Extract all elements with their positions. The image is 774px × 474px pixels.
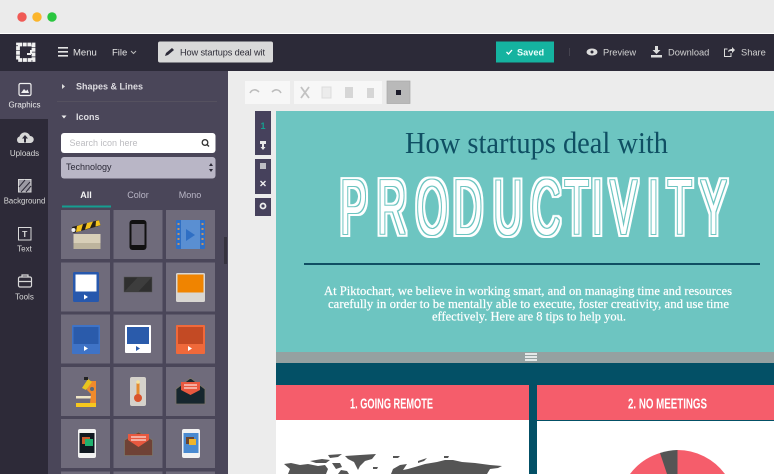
- card: no meetings: [537, 385, 774, 474]
- file menu: File: [112, 48, 127, 58]
- world map: [284, 454, 502, 474]
- duplicate and delete controls: [255, 159, 271, 194]
- shapes and lines section: Shapes & Lines: [76, 82, 143, 92]
- icon: film video: [176, 220, 205, 249]
- icon style tabs: All: [80, 190, 92, 200]
- icon: thermometer: [130, 377, 146, 406]
- icon: dark envelope: [176, 378, 205, 404]
- card: going remote: [276, 385, 529, 474]
- intro paragraph: effectively. Here are 8 tips to help you.: [432, 310, 626, 324]
- category dropdown: Technology: [66, 162, 112, 172]
- rail item: uploads: Uploads: [10, 149, 39, 158]
- icon: dark screen: [124, 277, 152, 292]
- infographic canvas: [276, 111, 774, 474]
- share action: Share: [741, 48, 766, 58]
- rail item: text: Text: [17, 244, 33, 254]
- settings control: [255, 198, 271, 216]
- saved button: [496, 42, 554, 62]
- menu label: Menu: [73, 48, 97, 58]
- icon: orange media player: [176, 325, 205, 354]
- icon: phone with chat blue: [182, 429, 200, 458]
- productivity headline: PRODUCTIVITY: [340, 165, 727, 252]
- icon: microscope: [76, 377, 96, 407]
- title line: How startups deal with: [405, 125, 668, 160]
- browser window title bar: [0, 0, 774, 34]
- document name field: How startups deal wit: [180, 48, 265, 58]
- section side toolbar: [255, 111, 271, 216]
- rail item: graphics: Graphics: [8, 100, 41, 110]
- icon style tabs: Mono: [179, 190, 201, 200]
- category dropdown: [61, 157, 216, 178]
- preview action: Preview: [603, 48, 636, 58]
- rail item: uploads: [10, 132, 39, 158]
- icon: clapperboard: [72, 220, 100, 249]
- share action: [724, 47, 766, 58]
- icon style tabs: [62, 190, 201, 208]
- icon: orange screen: [176, 273, 205, 302]
- top navigation bar: [0, 34, 774, 71]
- saved button: Saved: [517, 48, 544, 58]
- search field: Search icon here: [70, 138, 138, 148]
- rail item: text: [17, 228, 33, 254]
- graphics panel: [48, 71, 228, 474]
- icon: white media player: [125, 325, 151, 353]
- teal header section: [276, 111, 774, 352]
- rail item: background: [4, 180, 45, 206]
- intro paragraph: carefully in order to be mentally able to execute, foster creativity, and use time: [328, 297, 729, 311]
- icon: smartphone: [130, 220, 146, 250]
- icons section heading: Icons: [76, 112, 100, 122]
- icon: blue media player: [72, 325, 100, 354]
- search field: [61, 133, 216, 153]
- intro paragraph: [324, 284, 732, 324]
- download action: [651, 46, 709, 58]
- icon: menu: [58, 47, 68, 57]
- rail item: graphics: [8, 84, 41, 110]
- rail item: tools: Tools: [15, 292, 34, 302]
- icon grid: [61, 210, 215, 474]
- icon: brown envelope: [124, 432, 152, 456]
- icon: blue frame tablet: [73, 272, 99, 302]
- preview action: [586, 48, 636, 58]
- download action: Download: [668, 48, 709, 58]
- intro paragraph: At Piktochart, we believe in working smart, and on managing time and resources: [324, 284, 732, 298]
- dark tips section: [276, 363, 774, 474]
- left icon rail: [0, 71, 48, 474]
- shapes and lines section: [57, 82, 217, 102]
- file menu: [112, 48, 136, 58]
- rail item: text: T: [22, 229, 28, 239]
- canvas background: [228, 71, 774, 474]
- edit toolbar: [245, 81, 410, 104]
- section number and move controls: 1: [260, 121, 266, 131]
- card heading: 1. GOING REMOTE: [350, 396, 433, 412]
- section divider handle: [276, 352, 774, 363]
- card heading: 2. NO MEETINGS: [628, 396, 707, 412]
- icon style tabs: Color: [127, 190, 149, 200]
- document name field: [158, 42, 273, 62]
- pie chart: [630, 450, 725, 474]
- icon: phone with chat dark: [78, 429, 96, 458]
- rail item: background: Background: [4, 196, 45, 206]
- rail item: tools: [15, 275, 34, 302]
- icon: logo: [18, 44, 34, 60]
- icons section heading: [62, 112, 100, 122]
